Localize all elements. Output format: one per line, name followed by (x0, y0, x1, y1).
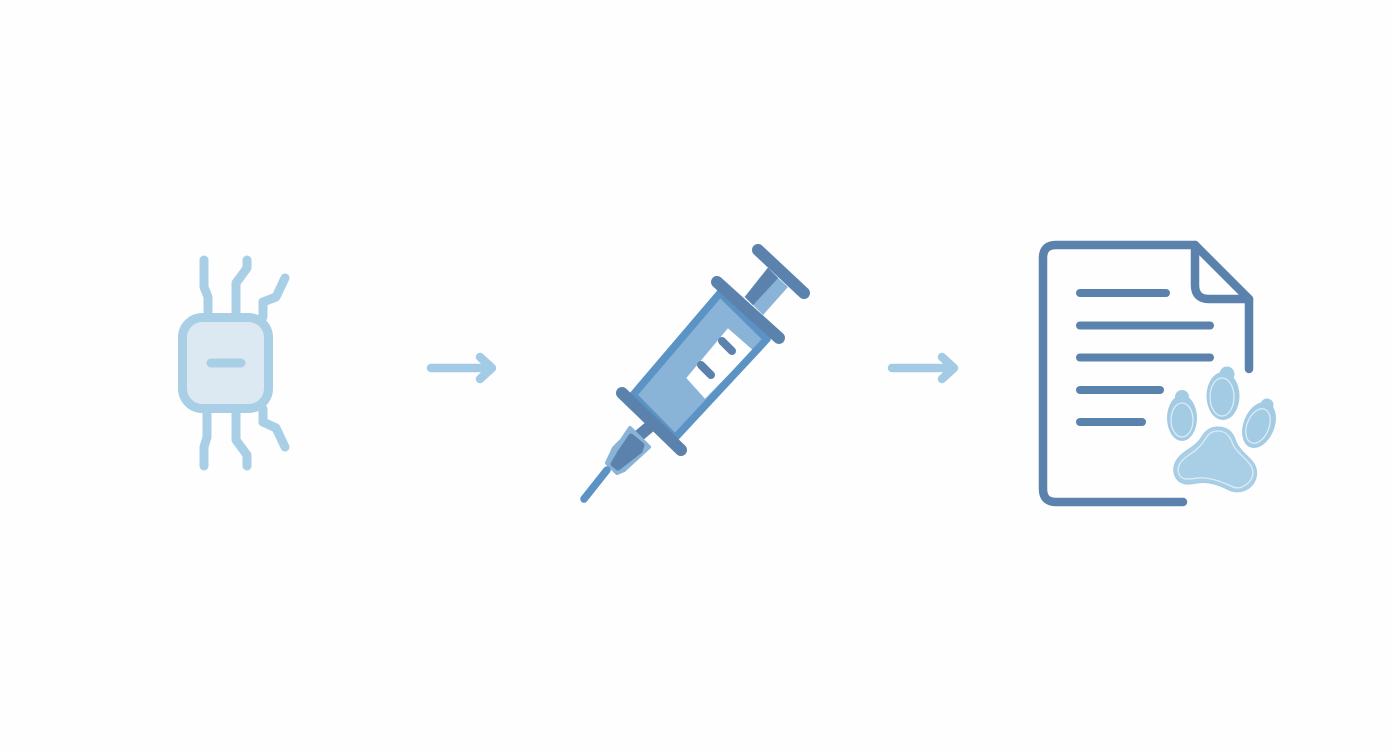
paw toes (1167, 366, 1282, 453)
icon: paw print (1167, 366, 1282, 492)
needle hub light (607, 428, 649, 473)
barrel outline (633, 293, 767, 438)
barrel upper flange (717, 282, 779, 338)
document text lines (1080, 293, 1210, 422)
arrow: syringe to record (892, 357, 954, 379)
document outline (1043, 245, 1249, 502)
plunger handle (758, 250, 804, 293)
document corner fold (1195, 245, 1249, 299)
arrow: chip to syringe (431, 357, 492, 379)
paw main pad (1174, 427, 1257, 492)
needle (584, 470, 607, 499)
plunger rod (745, 268, 788, 315)
barrel window (687, 329, 752, 398)
paw inner highlights (1171, 378, 1275, 488)
barrel tick marks (701, 341, 732, 375)
chip body (182, 318, 268, 408)
chip wires (204, 260, 285, 466)
icon: pet record document (1043, 245, 1282, 502)
syringe barrel fill (633, 293, 767, 438)
icon: microchip (182, 260, 285, 466)
chip minus mark (211, 358, 241, 368)
barrel lower flange (622, 393, 681, 450)
needle hub dark (613, 436, 642, 468)
syringe neck (635, 423, 654, 439)
icon: syringe (584, 250, 804, 499)
